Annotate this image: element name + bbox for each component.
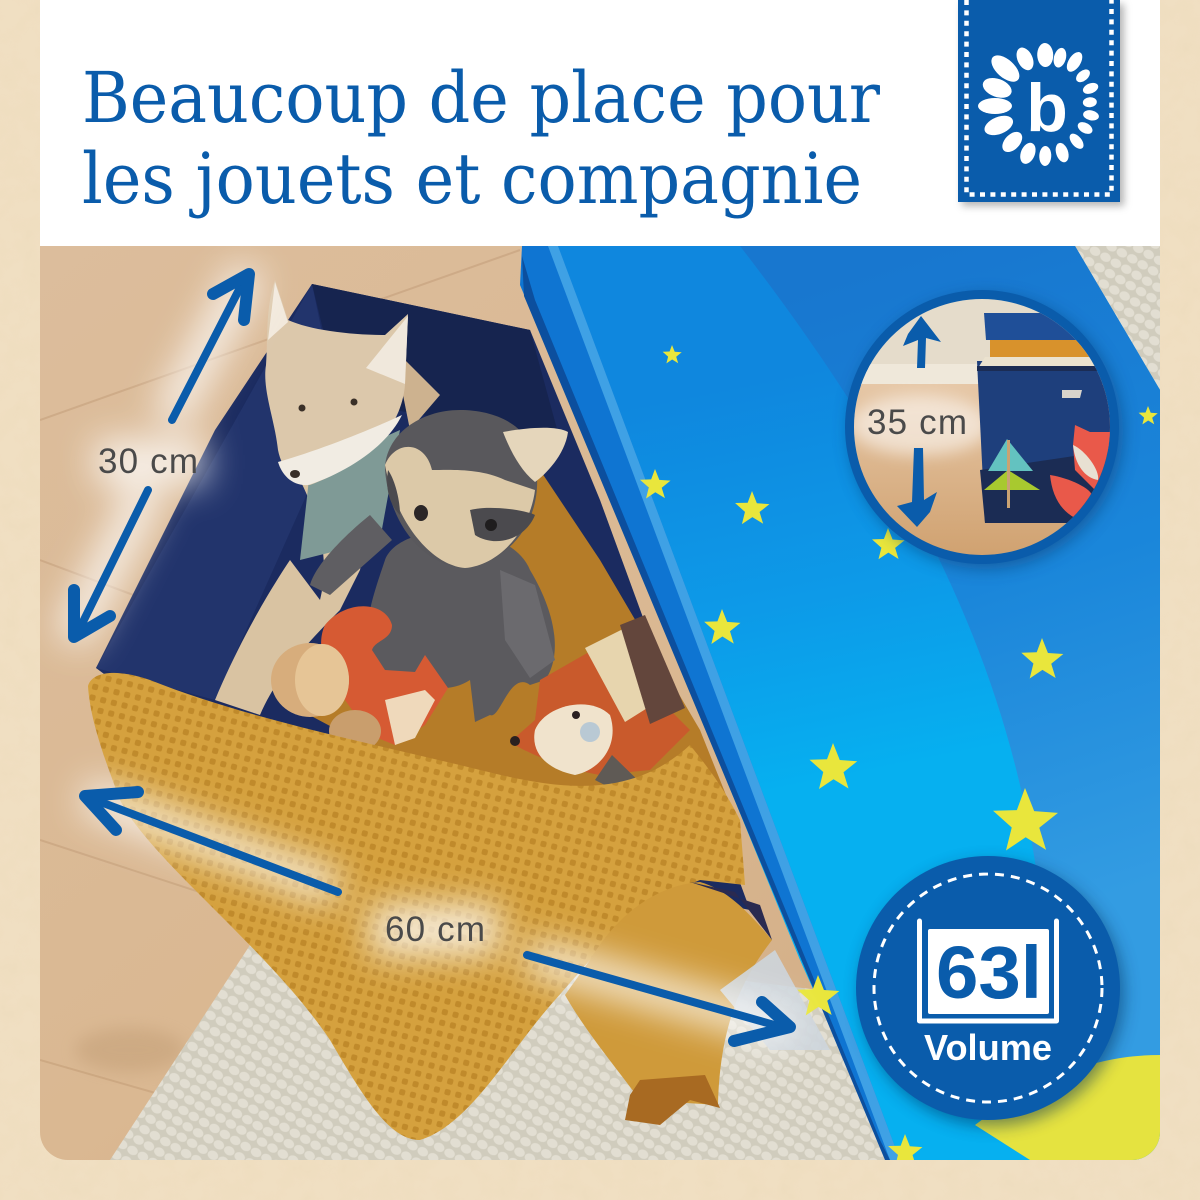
arrow: width right bbox=[527, 955, 790, 1041]
title bbox=[82, 57, 880, 220]
title: Beaucoup de place pour bbox=[82, 57, 880, 139]
white object under lid bbox=[720, 950, 830, 1050]
inset fox bbox=[1073, 425, 1110, 489]
inset scene bbox=[854, 299, 1110, 555]
rug bbox=[110, 945, 885, 1160]
opened lid bbox=[520, 246, 1160, 1160]
title: les jouets et compagnie bbox=[82, 138, 862, 220]
arrow: width left bbox=[85, 792, 338, 892]
yellow blanket bbox=[88, 673, 772, 1140]
dark fold under lid bbox=[690, 882, 772, 940]
label: 60 cm: 60 cm bbox=[385, 910, 485, 949]
volume icon: 63l bbox=[936, 931, 1042, 1014]
inset height arrow up bbox=[903, 316, 941, 368]
logo tag bbox=[958, 0, 1124, 206]
box interior bbox=[96, 284, 750, 910]
wooden toy hedgehog bbox=[510, 615, 690, 798]
volume label: Volume bbox=[924, 1027, 1052, 1068]
blanket right lobe bbox=[565, 882, 772, 1105]
inset box bbox=[977, 361, 1115, 523]
plush fox bbox=[215, 280, 440, 715]
logo letter b: b bbox=[1026, 70, 1068, 146]
arrow: depth up bbox=[172, 274, 249, 420]
lid stars bbox=[640, 345, 1158, 1167]
plush raccoon bbox=[310, 410, 568, 722]
height inset circle bbox=[845, 290, 1123, 569]
wood floor bbox=[40, 246, 1160, 1160]
inner blanket bbox=[312, 475, 726, 794]
inset height arrow down bbox=[897, 448, 937, 527]
white glow behind measurements bbox=[70, 270, 790, 1030]
rug top right bbox=[1075, 246, 1160, 390]
logo flower petals bbox=[978, 43, 1100, 166]
label: 35 cm: 35 cm bbox=[867, 403, 967, 442]
volume icon bbox=[920, 921, 1056, 1021]
blanket tassels bbox=[625, 1075, 720, 1125]
volume badge bbox=[856, 856, 1124, 1126]
header panel bbox=[40, 0, 1160, 246]
inset tree bbox=[988, 439, 1033, 471]
label: 30 cm: 30 cm bbox=[98, 442, 198, 481]
arrow: depth down bbox=[74, 490, 148, 637]
product photo bbox=[40, 246, 1160, 1167]
wooden toy fox bbox=[271, 606, 448, 752]
